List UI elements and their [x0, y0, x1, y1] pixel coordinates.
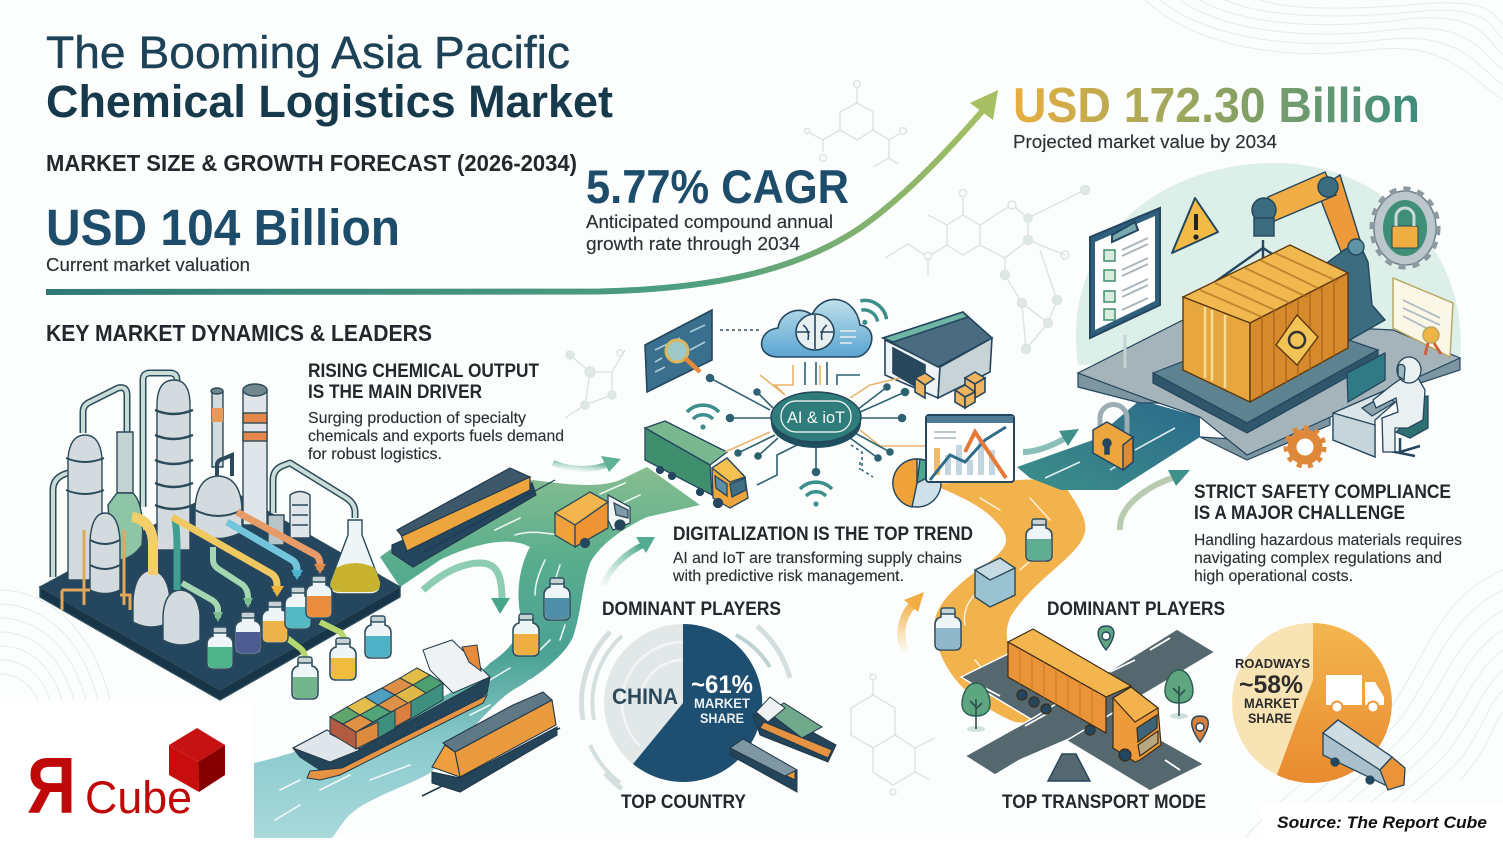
illustration: freight train upper — [392, 468, 555, 567]
illustration: compliance hub — [1076, 163, 1461, 470]
text: digitalization: DIGITALIZATION IS THE TOP TREND — [673, 524, 973, 545]
illustration: delivery truck — [555, 492, 630, 548]
icon: data panel — [645, 310, 712, 392]
checklist clipboard — [1090, 208, 1160, 368]
road icon — [1048, 754, 1090, 781]
title: Chemical Logistics Market — [46, 76, 613, 127]
text: safety: IS A MAJOR CHALLENGE — [1194, 503, 1405, 524]
pie chart: top transport mode: SHARE — [1248, 710, 1292, 726]
hazmat container — [1183, 245, 1348, 402]
text: rising output: for robust logistics. — [308, 446, 442, 463]
icon: analytics pie — [893, 459, 941, 507]
logo: RCube: Я — [27, 741, 76, 830]
pie chart: top country: SHARE — [700, 710, 744, 726]
security gear — [1372, 189, 1438, 267]
illustration: crossroad with truck — [961, 599, 1225, 813]
stat: CAGR: 5.77% CAGR — [586, 160, 849, 213]
arrow: growth curve — [46, 90, 998, 292]
text: safety: Handling hazardous materials requires — [1194, 532, 1462, 549]
text: rising output: chemicals and exports fuels demand — [308, 428, 564, 445]
text: rising output: IS THE MAIN DRIVER — [308, 382, 482, 403]
text: digitalization: with predictive risk management. — [672, 568, 904, 585]
illustration: crossroad with truck: TOP TRANSPORT MODE — [1002, 792, 1206, 813]
stat: CAGR — [586, 160, 849, 254]
icon: AI cloud — [762, 299, 872, 357]
pie train — [730, 739, 797, 792]
diagram: AI and IoT hub — [706, 362, 925, 485]
pie chart: top transport mode — [1232, 623, 1405, 790]
plant coloured pipes — [132, 512, 344, 658]
text: safety — [1194, 482, 1462, 585]
map pins — [1098, 626, 1208, 742]
icon: wifi signals — [687, 295, 891, 507]
mint backdrop — [1076, 163, 1461, 365]
arrows: flow — [423, 429, 1190, 650]
truck — [1008, 629, 1161, 762]
text: safety: STRICT SAFETY COMPLIANCE — [1194, 482, 1451, 503]
pie chart: top country: DOMINANT PLAYERS — [602, 599, 781, 620]
pie ship — [753, 697, 836, 762]
stat: projected value: USD 172.30 Billion — [1013, 79, 1420, 133]
orange road — [932, 478, 1100, 730]
cooler box — [975, 558, 1015, 607]
source credit: Source: The Report Cube — [1277, 813, 1487, 832]
padlock — [1093, 404, 1133, 470]
stat: projected value: Projected market value by 2034 — [1013, 132, 1277, 152]
icon: warehouse — [883, 312, 992, 408]
logo: RCube: Cube — [85, 772, 192, 823]
pie chart: top transport mode: ~58% — [1239, 671, 1303, 699]
section heading: dynamics: KEY MARKET DYNAMICS & LEADERS — [46, 320, 432, 346]
plant base plate — [40, 487, 400, 690]
ship container stacks — [330, 683, 443, 749]
decorative molecules — [565, 81, 1090, 795]
pie chart: top transport mode: ROADWAYS — [1235, 656, 1310, 671]
illustration: lower train — [422, 692, 560, 796]
diagram: AI and IoT hub: AI & ioT — [787, 408, 845, 427]
illustration: chemical plant — [40, 373, 400, 700]
text: rising output: Surging production of specialty — [308, 410, 526, 427]
flask — [330, 520, 380, 594]
plant pipes behind — [53, 373, 355, 577]
icon: analytics chart — [926, 415, 1014, 482]
text: digitalization — [672, 524, 973, 585]
platform — [1078, 320, 1460, 460]
logo: RCube — [0, 703, 254, 838]
pie chart: top country — [582, 599, 836, 813]
operator at desk — [1333, 353, 1428, 457]
robot arm — [1208, 172, 1385, 340]
white truck icon — [1326, 675, 1384, 712]
small gear — [1286, 428, 1324, 466]
text: safety: navigating complex regulations and — [1194, 550, 1442, 567]
source credit — [1262, 803, 1503, 838]
connector: dashed link — [720, 329, 762, 331]
pie chart: top country: MARKET — [694, 695, 750, 711]
section heading: market size: MARKET SIZE & GROWTH FORECAST (2026-2034) — [46, 150, 577, 176]
stat: CAGR: growth rate through 2034 — [586, 234, 800, 254]
certificate — [1393, 278, 1453, 357]
stat: CAGR: Anticipated compound annual — [586, 212, 833, 232]
illustration: container ship — [293, 640, 490, 780]
warning triangle — [1172, 198, 1218, 253]
teal road — [1017, 400, 1200, 490]
illustration: crossroad with truck: DOMINANT PLAYERS — [1047, 599, 1225, 620]
pie chart: top country: TOP COUNTRY — [621, 792, 746, 813]
pie chart: top transport mode: MARKET — [1244, 695, 1299, 711]
text: safety: high operational costs. — [1194, 568, 1353, 585]
chemical bottles — [207, 519, 1052, 699]
text: rising output — [308, 361, 564, 463]
title — [46, 27, 613, 127]
text: digitalization: AI and IoT are transforming supply chains — [673, 550, 962, 567]
bottom white strip — [0, 838, 1503, 848]
stat: current value: Current market valuation — [46, 255, 250, 275]
grey truck — [1323, 720, 1405, 790]
illustration: green container truck — [645, 421, 748, 508]
stat: current value: USD 104 Billion — [46, 199, 400, 256]
pie chart: top country: ~61% — [691, 671, 753, 699]
text: rising output: RISING CHEMICAL OUTPUT — [308, 361, 539, 382]
pie chart: top country: CHINA — [612, 684, 678, 709]
title: The Booming Asia Pacific — [46, 27, 570, 78]
green road and river — [254, 467, 700, 838]
